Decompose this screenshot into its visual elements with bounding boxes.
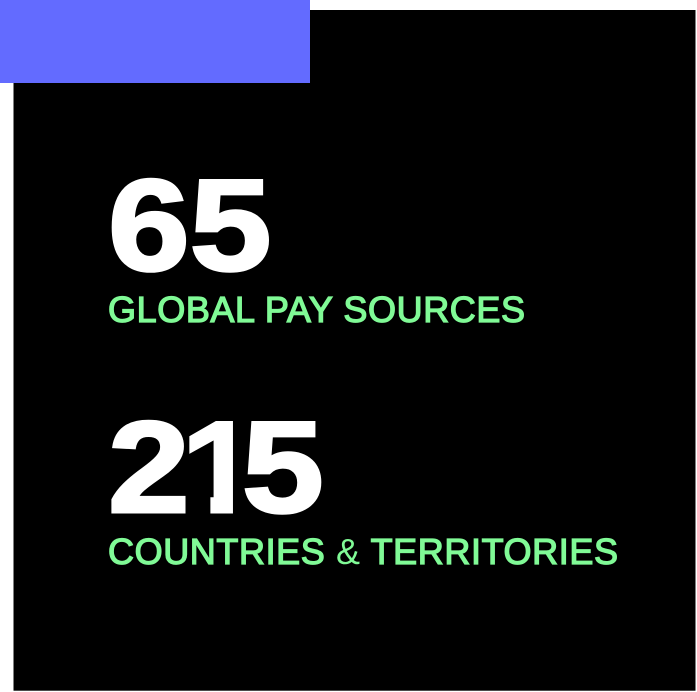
stat number: 215: 5 (242, 394, 324, 540)
blue corner tab (0, 0, 310, 83)
stat label: countries and territories: COUNTRIES & TERRITORIES (108, 531, 619, 572)
stat number: 215: 2 (108, 394, 190, 540)
stat number: 65: 65 (108, 152, 271, 298)
stat number: 215: 1 (181, 394, 263, 540)
stat label: global pay sources: GLOBAL PAY SOURCES (108, 289, 526, 330)
stat number: 215 (108, 394, 324, 540)
